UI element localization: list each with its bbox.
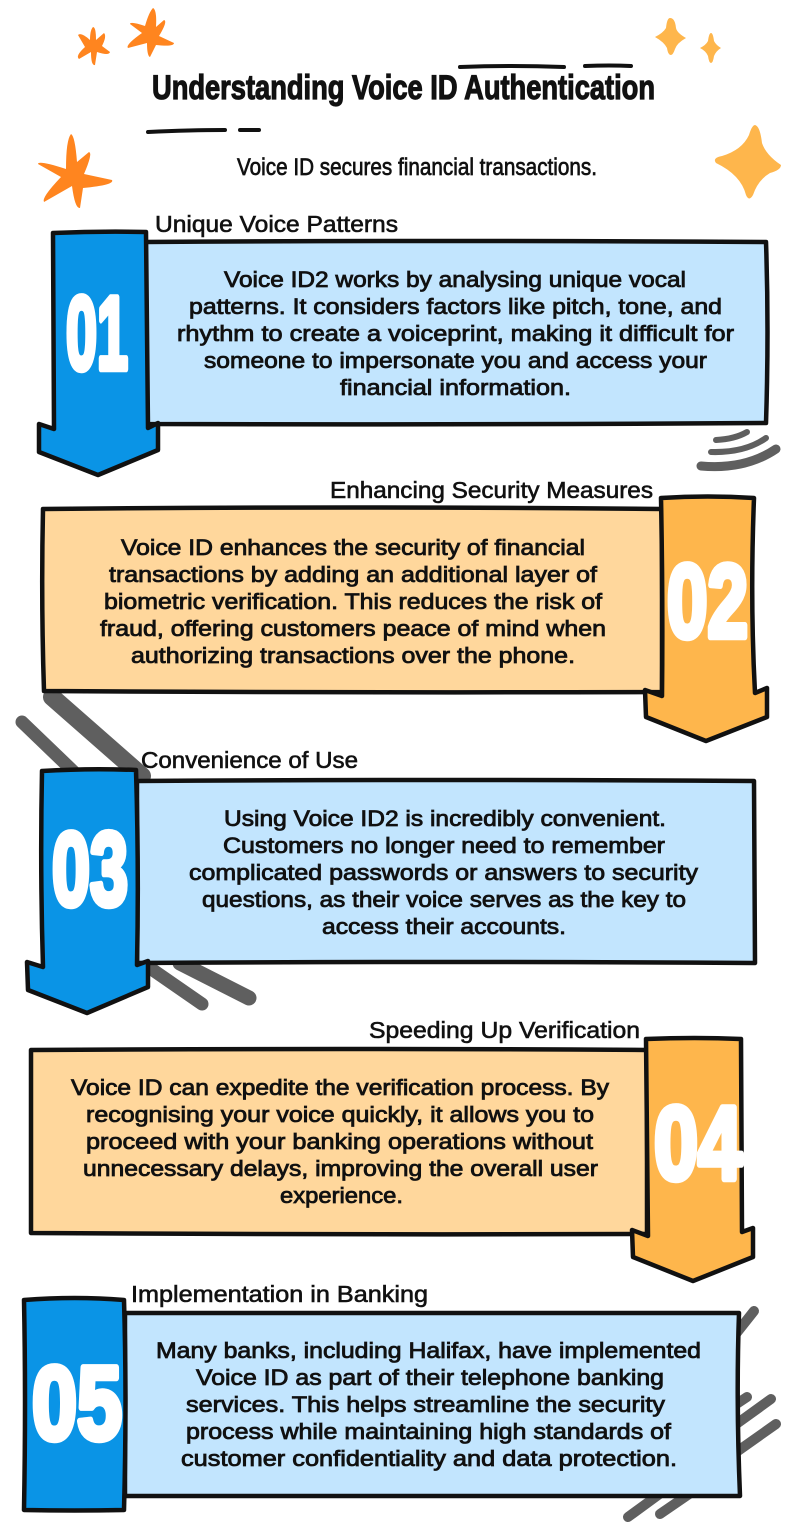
heading 4: Speeding Up Verification [369, 1017, 640, 1043]
text 2: Voice ID enhances the security of financial [121, 535, 585, 560]
number 02: 02 [667, 544, 748, 660]
heading 3: Convenience of Use [141, 747, 358, 773]
text 1: Voice ID2 works by analysing unique vocal [224, 267, 686, 292]
number 04: 04 [654, 1086, 742, 1202]
section 4: speeding up verification [31, 1017, 753, 1281]
title: Understanding Voice ID Authentication [152, 69, 655, 107]
arrow 1 [39, 232, 158, 475]
text 5: process while maintaining high standards of [186, 1419, 672, 1444]
section 5: implementation in banking [24, 1281, 740, 1510]
panel 3 [137, 780, 755, 963]
arrow 4 [632, 1038, 753, 1281]
heading 1: Unique Voice Patterns [155, 211, 398, 237]
text 3: complicated passwords or answers to security [189, 860, 698, 885]
text 2: transactions by adding an additional layer of [109, 562, 598, 587]
text 2: fraud, offering customers peace of mind when [100, 616, 606, 641]
diagonal strokes behind section 3 [22, 697, 249, 1004]
text 5 [156, 1338, 701, 1471]
number 03: 03 [52, 812, 128, 928]
panel 2 [42, 508, 662, 692]
diagonal strokes behind section 5 [628, 1311, 776, 1517]
panel 5 [125, 1312, 740, 1496]
text 1: someone to impersonate you and access your [204, 348, 707, 373]
section 2: enhancing security measures [42, 477, 767, 741]
text 5: services. This helps streamline the security [186, 1392, 665, 1417]
text 3: access their accounts. [322, 914, 566, 939]
text 1: patterns. It considers factors like pitch, tone, and [189, 294, 722, 319]
number 01: 01 [66, 276, 128, 392]
section 1: unique voice patterns [39, 211, 768, 475]
panel 4 [31, 1049, 647, 1234]
text 4: experience. [280, 1183, 403, 1208]
icon: orange star top [128, 8, 174, 57]
text 2: authorizing transactions over the phone. [131, 643, 575, 668]
text 5: customer confidentiality and data protection. [181, 1446, 677, 1471]
heading 5: Implementation in Banking [131, 1281, 428, 1307]
arrow 3 [27, 769, 148, 1013]
text 4: recognising your voice quickly, it allows you to [86, 1102, 594, 1127]
text 2 [100, 535, 606, 668]
text 4 [71, 1075, 609, 1208]
arrow 2 [645, 496, 767, 741]
panel 1 [145, 241, 768, 424]
text 4: Voice ID can expedite the verification process. By [71, 1075, 609, 1100]
icon: yellow sparkle small [655, 18, 686, 55]
text 4: unnecessary delays, improving the overall user [83, 1156, 598, 1181]
text 2: biometric verification. This reduces the risk of [104, 589, 603, 614]
text 4: proceed with your banking operations without [86, 1129, 593, 1154]
icon: small orange star [78, 27, 110, 65]
icon: yellow sparkle tiny [700, 33, 721, 63]
text 1 [177, 267, 734, 400]
number 05: 05 [32, 1346, 122, 1462]
icon: yellow sparkle large [715, 125, 781, 198]
subtitle: Voice ID secures financial transactions. [237, 154, 597, 181]
title accent strokes [148, 66, 631, 132]
text 1: financial information. [340, 375, 571, 400]
heading 2: Enhancing Security Measures [330, 477, 653, 503]
icon: large orange star [38, 134, 112, 208]
text 5: Voice ID as part of their telephone banking [196, 1365, 664, 1390]
decorative swoosh lines [701, 432, 776, 467]
text 1: rhythm to create a voiceprint, making it difficult for [177, 321, 734, 346]
text 3: Using Voice ID2 is incredibly convenient. [224, 806, 666, 831]
text 3: questions, as their voice serves as the key to [202, 887, 686, 912]
text 3 [189, 806, 698, 939]
tab 5 [24, 1298, 126, 1510]
section 3: convenience of use [27, 747, 755, 1013]
text 5: Many banks, including Halifax, have implemented [156, 1338, 701, 1363]
text 3: Customers no longer need to remember [223, 833, 665, 858]
